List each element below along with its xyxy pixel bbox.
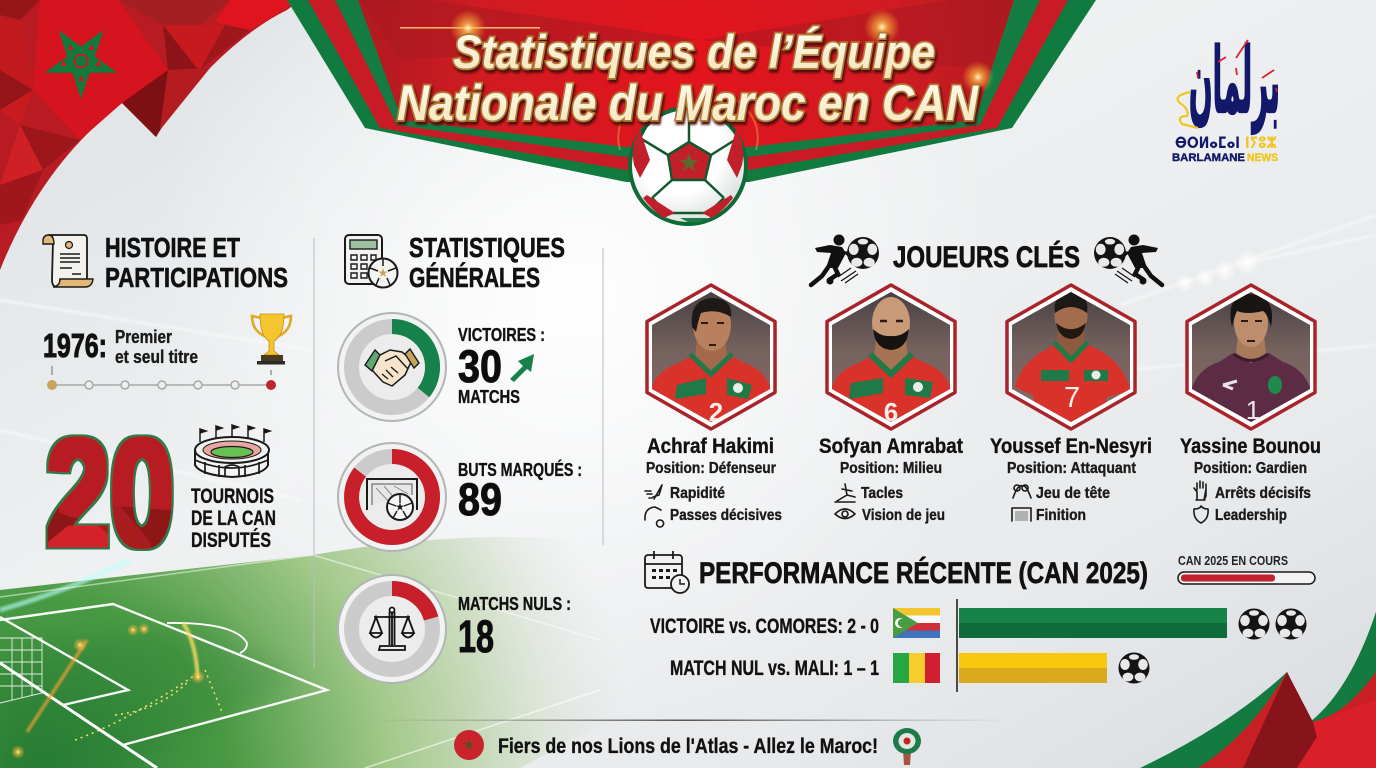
icon: federation emblem: [893, 728, 921, 765]
icon: flag badge: [454, 730, 484, 760]
portrait: Amrabat: 6: [884, 397, 898, 427]
panel: statistiques générales: [338, 232, 582, 683]
icon: trophy: [252, 314, 291, 364]
icon: scales: [370, 608, 414, 650]
portrait: Bounou: [1187, 285, 1315, 429]
milestone 1976: Premier: [115, 327, 172, 347]
stat: victoires: [338, 313, 545, 421]
label: tournois: DE LA CAN: [191, 507, 276, 530]
row: victoire vs comores: VICTOIRE vs. COMORES: 2 - 0: [650, 615, 879, 638]
icon: soccer ball: [628, 106, 748, 226]
icon: tackle: [835, 484, 855, 502]
icon: balls: [1238, 608, 1306, 640]
logo: Barlamane News: NEWS: [1247, 152, 1278, 164]
footer: [365, 720, 1010, 765]
player card: Sofyan Amrabat: Tacles: [861, 485, 903, 502]
icon: player kicking left: [811, 234, 879, 285]
text: buts: [458, 459, 582, 525]
flag: Comores: [893, 608, 940, 638]
ring chart: victoires: [338, 313, 446, 421]
label: tournois: [191, 485, 276, 552]
player card: Youssef En-Nesyri: Finition: [1036, 507, 1086, 524]
portrait: En-Nesyri: 7: [1064, 382, 1080, 414]
progress: can 2025 en cours: [1178, 554, 1315, 584]
icon: calendar clock: [645, 551, 689, 593]
text: victoires: 30: [458, 341, 502, 392]
player card: Yassine Bounou: Leadership: [1215, 507, 1287, 524]
label: tournois: DISPUTÉS: [191, 529, 271, 552]
milestone 1976: 1976:: [43, 327, 107, 364]
player card: Yassine Bounou: Position: Gardien: [1194, 460, 1307, 477]
heading: JOUEURS CLÉS: [893, 240, 1080, 274]
bar: victoire: [959, 608, 1227, 638]
logo: Barlamane News: [1172, 28, 1280, 164]
ring chart: nuls: [338, 575, 446, 683]
player card: Youssef En-Nesyri: [990, 285, 1152, 524]
player card: Sofyan Amrabat: [819, 285, 963, 524]
text: victoires: MATCHS: [458, 386, 520, 407]
portrait: Amrabat: [827, 285, 955, 429]
bar: nul: [959, 653, 1107, 683]
heading: PERFORMANCE RÉCENTE (CAN 2025): [699, 556, 1148, 590]
icon: stadium: [195, 425, 270, 477]
icon: goal and ball: [367, 479, 417, 520]
heading: [105, 232, 288, 293]
text: buts: 89: [458, 474, 502, 525]
portrait: Bounou: 1: [1246, 395, 1260, 425]
icon: shield: [1194, 506, 1208, 523]
divider lines: [314, 238, 603, 668]
player card: Youssef En-Nesyri: Jeu de tête: [1036, 485, 1110, 502]
player card: Achraf Hakimi: Rapidité: [670, 485, 725, 502]
milestone 1976: [43, 327, 198, 367]
corner: bottom-right facets: [1140, 612, 1376, 768]
player card: Yassine Bounou: Arrêts décisifs: [1215, 485, 1311, 502]
row: match nul vs mali: [670, 652, 1150, 684]
timeline: [47, 366, 276, 390]
progress: can 2025 en cours: CAN 2025 EN COURS: [1178, 554, 1288, 568]
icon: ball: [1118, 652, 1150, 684]
icon: handshake: [365, 349, 419, 386]
icon: goal net: [1012, 508, 1031, 521]
player card: Sofyan Amrabat: Position: Milieu: [840, 460, 942, 477]
heading: HISTOIRE ET: [105, 232, 240, 263]
text: victoires: [458, 324, 545, 407]
heading: GÉNÉRALES: [409, 262, 540, 293]
player card: Sofyan Amrabat: Sofyan Amrabat: [819, 435, 963, 458]
logo: Barlamane News: ⵏⵢⵓⵣ: [1245, 133, 1277, 152]
flag: Mali: [893, 653, 940, 683]
icon: pass: [645, 507, 664, 527]
player card: Youssef En-Nesyri: Youssef En-Nesyri: [990, 435, 1152, 458]
title: Nationale du Maroc en CAN: [397, 75, 979, 131]
stat: matchs nuls: [338, 575, 571, 683]
icon: green flag star: [45, 30, 117, 99]
portrait: En-Nesyri: [1007, 285, 1135, 429]
panel: joueurs clés: [645, 234, 1321, 527]
logo: Barlamane News: BARLAMANE: [1172, 152, 1245, 164]
corner: Moroccan flag top-left: [0, 0, 300, 270]
text: nuls: [458, 593, 571, 662]
player card: Sofyan Amrabat: Vision de jeu: [862, 507, 945, 524]
icon: calculator and ball: [345, 235, 398, 288]
player card: Achraf Hakimi: [645, 285, 782, 527]
logo: Barlamane News: ⴱⵔⵍⴰⵎⴰⵏ: [1175, 133, 1240, 152]
player card: Achraf Hakimi: Achraf Hakimi: [647, 435, 774, 458]
heading: PARTICIPATIONS: [105, 262, 288, 293]
player card: Yassine Bounou: [1180, 285, 1321, 524]
milestone 1976: et seul titre: [115, 347, 198, 367]
icon: scroll: [43, 235, 93, 287]
number 20: 20: [46, 408, 174, 578]
icon: heading: [1013, 485, 1031, 498]
icon: speed: [645, 485, 662, 499]
text: nuls: MATCHS NULS :: [458, 593, 571, 614]
panel: histoire et participations: [43, 232, 291, 578]
header banner: [287, 0, 1096, 226]
logo: Barlamane News: برلمان: [1189, 28, 1280, 135]
title: [397, 25, 979, 131]
player card: Youssef En-Nesyri: Position: Attaquant: [1007, 460, 1137, 477]
text: nuls: 18: [458, 611, 494, 662]
icon: up arrow: [510, 354, 534, 382]
heading: STATISTIQUES: [409, 232, 565, 263]
stat: buts marqués: [338, 443, 582, 551]
text: buts: BUTS MARQUÉS :: [458, 459, 582, 480]
label: tournois: TOURNOIS: [191, 485, 274, 508]
player card: Achraf Hakimi: Passes décisives: [670, 507, 782, 524]
axis: [956, 599, 958, 692]
player card: Achraf Hakimi: Position: Défenseur: [646, 460, 776, 477]
icon: player kicking right: [1094, 234, 1162, 285]
ring chart: buts: [338, 443, 446, 551]
panel: performance récente: [645, 551, 1315, 692]
portrait: Hakimi: [647, 285, 775, 429]
heading: [409, 232, 565, 293]
slogan: Fiers de nos Lions de l'Atlas - Allez le Maroc!: [498, 735, 878, 758]
text: victoires: VICTOIRES :: [458, 324, 545, 345]
player card: Yassine Bounou: Yassine Bounou: [1180, 435, 1321, 458]
row: match nul vs mali: MATCH NUL vs. MALI: 1 – 1: [670, 657, 879, 680]
title: Statistiques de l’Équipe: [453, 25, 935, 78]
row: victoire vs comores: [650, 608, 1306, 640]
icon: eye: [835, 509, 855, 518]
icon: glove: [1194, 481, 1206, 500]
portrait: Hakimi: 2: [709, 397, 723, 427]
